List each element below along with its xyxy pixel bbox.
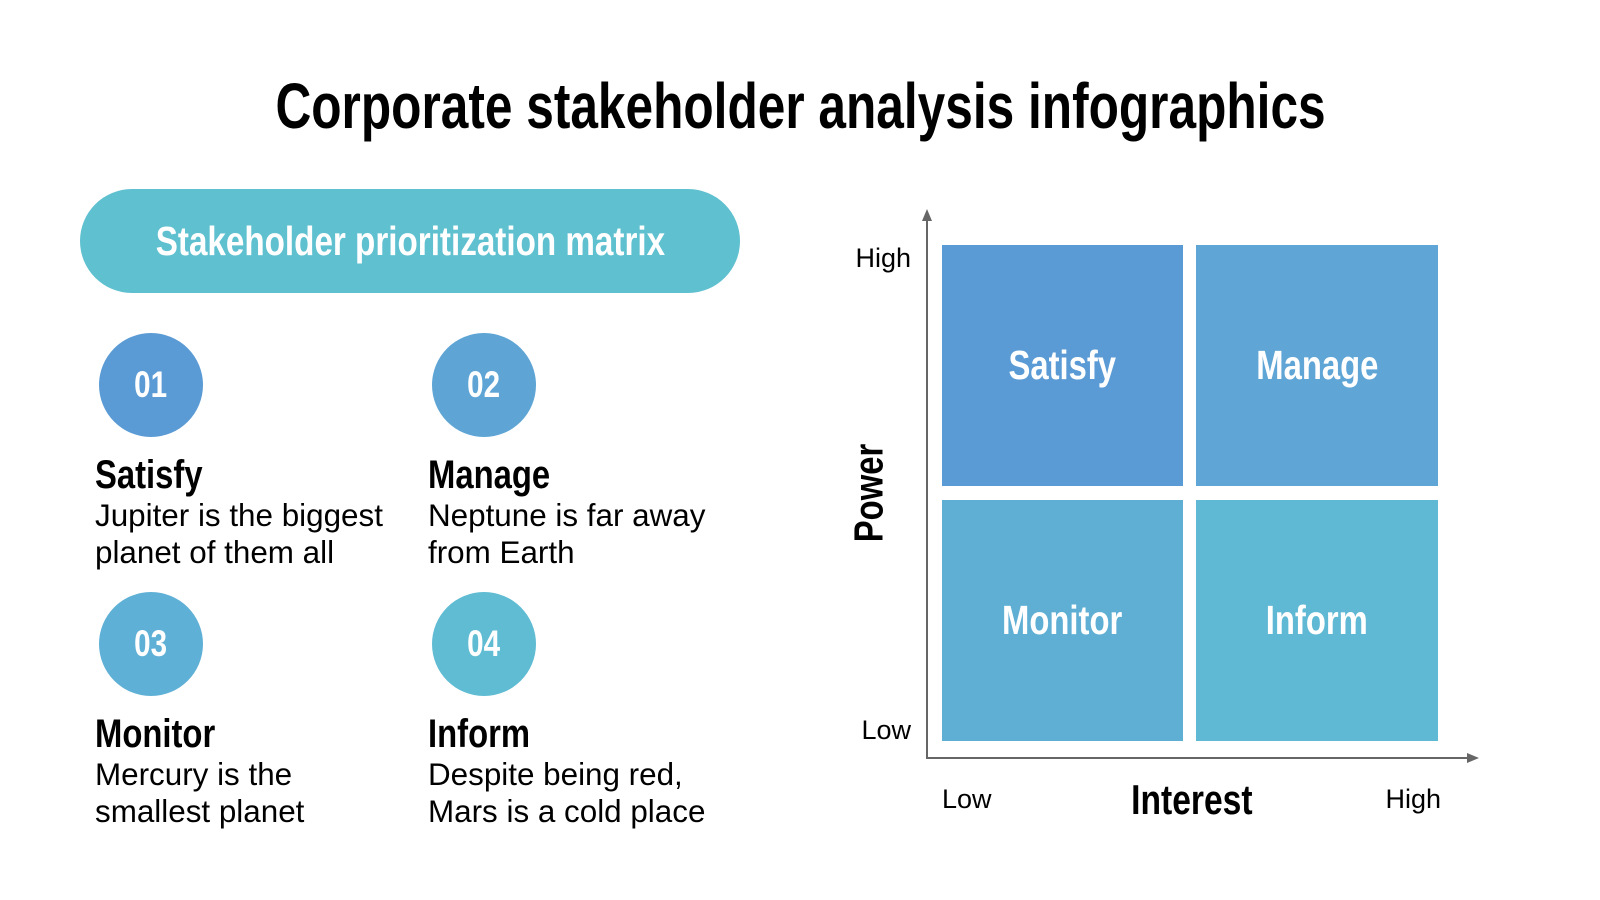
label High (x): High — [1385, 784, 1441, 814]
circle 02 — [432, 333, 536, 437]
label High (y): High — [855, 243, 911, 273]
quadrant: Satisfy — [942, 245, 1183, 486]
desc: Jupiter is the biggest planet of them all — [95, 498, 383, 570]
circle 02: 02 — [468, 364, 500, 405]
item 02 — [428, 333, 706, 570]
heading: Manage: Manage — [428, 453, 550, 497]
quadrant: Inform — [1196, 500, 1438, 741]
label Interest: Interest — [1131, 776, 1253, 823]
matrix chart — [846, 209, 1479, 823]
quadrant: Satisfy: Satisfy — [1009, 342, 1116, 388]
label Low (y): Low — [861, 715, 911, 745]
label Power: Power — [846, 443, 892, 542]
circle 01: 01 — [135, 364, 167, 405]
quadrant: Manage — [1196, 245, 1438, 486]
item 03 — [95, 592, 304, 828]
circle 04 — [432, 592, 536, 696]
heading: Satisfy: Satisfy — [95, 453, 203, 497]
desc: Despite being red, Mars is a cold place — [428, 757, 705, 828]
quadrant: Monitor: Monitor — [1002, 597, 1123, 643]
pill header — [80, 189, 740, 293]
quadrant: Manage: Manage — [1256, 342, 1378, 388]
label Low (x): Low — [942, 784, 992, 814]
axes — [922, 209, 1479, 763]
pill header: Stakeholder prioritization matrix — [155, 218, 665, 264]
circle 04: 04 — [468, 623, 500, 664]
item 01 — [95, 333, 383, 570]
title: Corporate stakeholder analysis infographics — [276, 70, 1326, 142]
heading: Inform: Inform — [428, 712, 530, 756]
desc: Mercury is the smallest planet — [95, 757, 304, 828]
heading: Monitor: Monitor — [95, 712, 215, 756]
quadrant: Monitor — [942, 500, 1183, 741]
circle 03 — [99, 592, 203, 696]
quadrant: Inform: Inform — [1266, 597, 1368, 643]
circle 01 — [99, 333, 203, 437]
desc: Neptune is far away from Earth — [428, 498, 705, 570]
circle 03: 03 — [135, 623, 167, 664]
item 04 — [428, 592, 705, 828]
